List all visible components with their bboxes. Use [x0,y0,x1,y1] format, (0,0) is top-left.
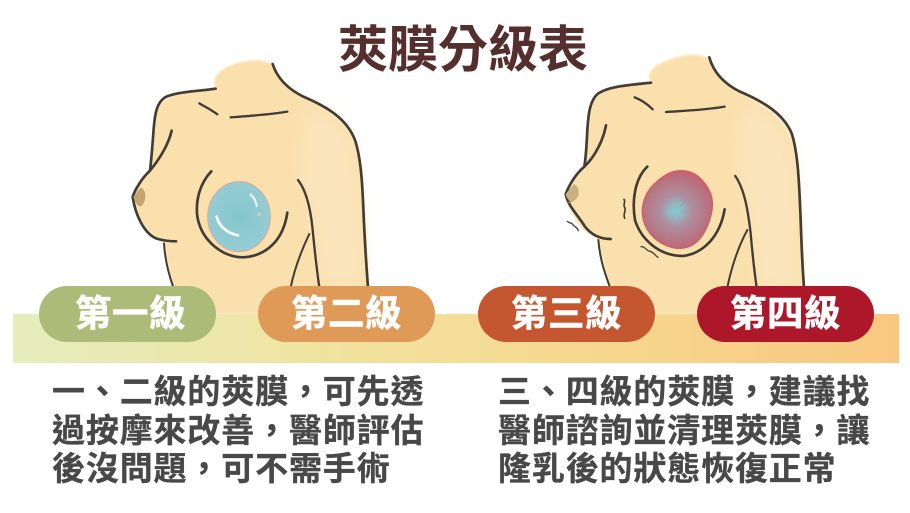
severity gradient band [13,314,899,363]
outline strokes [133,64,368,287]
text: grades one and two [52,373,424,487]
badge: grade 1: 第一級 [75,293,186,334]
skin [133,60,369,314]
text: grades one and two: 過按摩來改善，醫師評估 [52,412,424,448]
badge: grade 3 [478,286,655,342]
badge: grade 4 [697,286,874,342]
areola [566,184,579,201]
figure: grade three and four torso [566,55,805,314]
badge: grade 1 [39,286,216,342]
implant: contracted red [642,171,712,248]
text: grades three and four: 三、四級的莢膜，建議找 [498,373,870,410]
outline strokes [566,57,804,287]
implant: round blue [208,182,270,252]
badge: grade 4: 第四級 [730,293,841,334]
skin [566,55,805,314]
title: 莢膜分級表 [338,22,588,78]
text: grades three and four [498,373,870,487]
text: grades three and four: 醫師諮詢並清理莢膜，讓 [498,412,870,448]
badge: grade 2: 第二級 [291,293,402,334]
areola [133,187,145,206]
text: grades one and two: 一、二級的莢膜，可先透 [52,373,424,410]
badge: grade 3: 第三級 [511,293,622,334]
text: grades three and four: 隆乳後的狀態恢復正常 [498,450,836,487]
figure: grade one and two torso [133,60,369,314]
text: grades one and two: 後沒問題，可不需手術 [52,450,390,487]
badge: grade 2 [258,286,435,342]
